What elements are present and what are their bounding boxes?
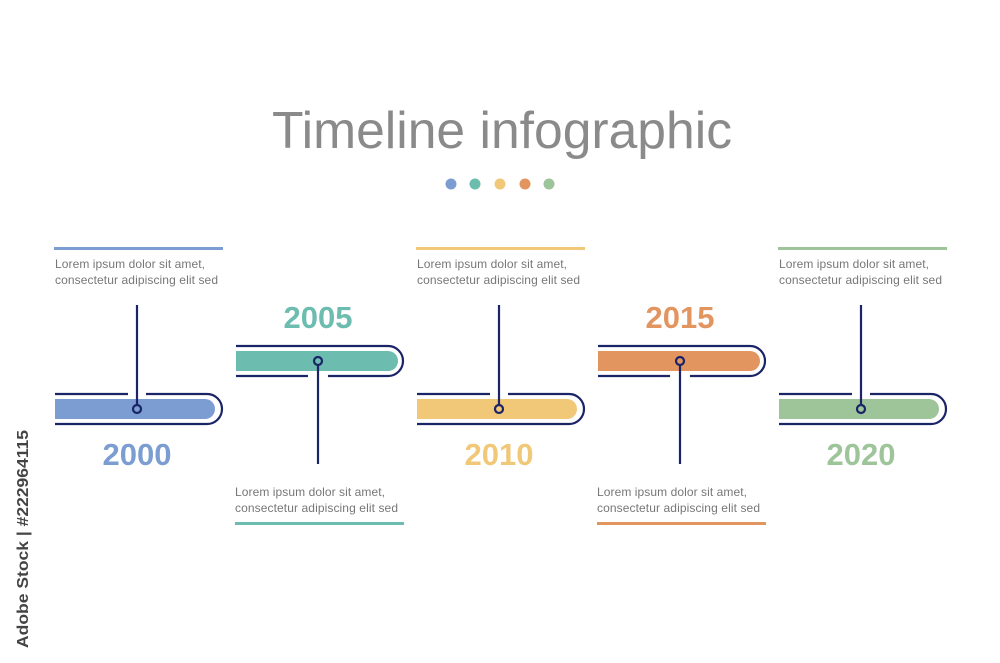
item 2005: 2005 — [284, 300, 352, 335]
item 2005: consectetur adipiscing elit sed — [235, 501, 398, 515]
title: Timeline infographic — [272, 102, 732, 160]
item 2005: Lorem ipsum dolor sit amet, — [235, 485, 385, 499]
item 2010 — [416, 247, 585, 472]
item 2000 — [54, 247, 223, 472]
item 2015: consectetur adipiscing elit sed — [597, 501, 760, 515]
side credit: Adobe Stock | #222964115 — [15, 430, 32, 648]
item 2000: 2000 — [103, 437, 171, 472]
item 2020: 2020 — [827, 437, 895, 472]
color dots — [446, 178, 554, 190]
item 2000: Lorem ipsum dolor sit amet, — [55, 257, 205, 271]
item 2010: Lorem ipsum dolor sit amet, — [417, 257, 567, 271]
item 2010: 2010 — [465, 437, 533, 472]
item 2015: 2015 — [646, 300, 714, 335]
item 2015: Lorem ipsum dolor sit amet, — [597, 485, 747, 499]
item 2020: Lorem ipsum dolor sit amet, — [779, 257, 929, 271]
item 2020: consectetur adipiscing elit sed — [779, 273, 942, 287]
item 2010: consectetur adipiscing elit sed — [417, 273, 580, 287]
item 2000: consectetur adipiscing elit sed — [55, 273, 218, 287]
item 2015 — [597, 300, 766, 525]
item 2005 — [235, 300, 404, 525]
item 2020 — [778, 247, 947, 472]
